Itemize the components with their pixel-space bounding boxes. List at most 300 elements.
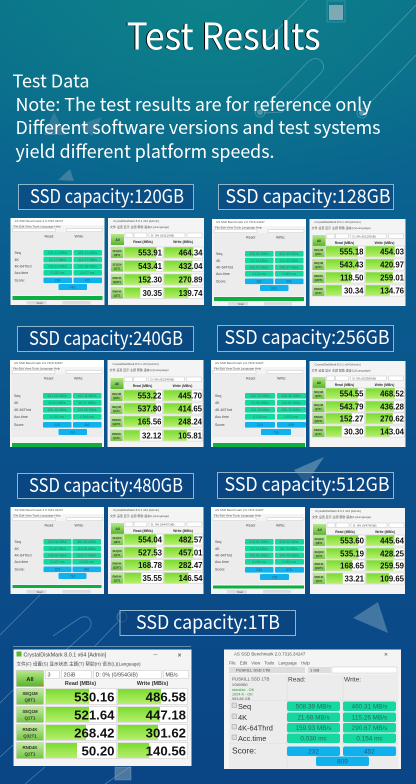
CrystalDiskMark window 240GB: Q32T1 — [113, 422, 121, 426]
AS SSD window 1TB: File Edit View Tools Language Help — [229, 660, 310, 666]
CrystalDiskMark window 240GB: D: 0% (0/224GiB) — [150, 377, 174, 381]
CrystalDiskMark window 128GB: RND4K — [314, 287, 323, 291]
CrystalDiskMark window 256GB: Q32T1 — [315, 419, 323, 423]
AS SSD window 512GB — [211, 507, 305, 594]
AS SSD window 1TB: 159.93 MB/s — [296, 725, 331, 732]
CrystalDiskMark window 1TB: × — [178, 652, 182, 660]
CrystalDiskMark window 480GB: 457.01 — [179, 548, 203, 558]
AS SSD window 128GB: File Edit View Tools Language Help — [215, 226, 262, 230]
AS SSD window 480GB — [10, 507, 104, 594]
CrystalDiskMark window 1TB — [14, 650, 192, 766]
heading: SSD capacity 1TB: SSD capacity:1TB — [136, 608, 280, 635]
AS SSD window 480GB: Acc.time — [14, 560, 28, 564]
AS SSD window 240GB — [10, 360, 104, 447]
CrystalDiskMark window 256GB: Read (MB/s) — [335, 383, 354, 387]
AS SSD window 1TB: 0.154 ms — [356, 736, 383, 742]
AS SSD window 512GB: Acc.time — [215, 560, 229, 564]
AS SSD window 512GB: 728 — [272, 576, 277, 580]
AS SSD window 128GB: Score: — [216, 280, 226, 284]
CrystalDiskMark window 480GB: D: 0% (0/447GiB) — [151, 522, 175, 526]
AS SSD window 480GB: 461.86 MB/s — [77, 540, 96, 544]
CrystalDiskMark window 128GB: SEQ1M — [314, 248, 323, 252]
text block: test data note: Different software versions and test systems — [16, 114, 380, 140]
AS SSD window 480GB: 146.80 MB/s — [48, 554, 67, 558]
CrystalDiskMark window 1TB: Read (MB/s) — [65, 681, 96, 687]
AS SSD window 128GB: 0.124 ms — [252, 272, 266, 276]
AS SSD window 512GB: 0.262 ms — [282, 560, 296, 564]
CrystalDiskMark window 256GB: 468.52 — [380, 390, 405, 398]
AS SSD window 128GB: 0.660 ms — [282, 272, 296, 276]
CrystalDiskMark window 1TB: RND4K — [22, 745, 38, 750]
CrystalDiskMark window 240GB: 537.80 — [138, 404, 162, 414]
AS SSD window 256GB: 0.675 ms — [284, 415, 298, 419]
AS SSD window 256GB: 736 — [273, 430, 279, 434]
CrystalDiskMark window 512GB: RND4K — [315, 562, 324, 566]
CrystalDiskMark window 128GB: 文件 设置 显示 主题 帮助 语言(L)(Language) — [312, 225, 371, 230]
AS SSD window 240GB: 362 — [84, 423, 90, 427]
AS SSD window 1TB: AS SSD Benchmark 2.0.7316.34247 — [234, 652, 306, 656]
AS SSD window 256GB: 4K — [215, 401, 220, 405]
AS SSD window 256GB: 408 — [288, 423, 294, 427]
AS SSD window 240GB: 0.151 ms — [50, 415, 64, 419]
CrystalDiskMark window 1TB: 521.64 — [74, 708, 115, 722]
CrystalDiskMark window 1TB: 486.58 — [146, 690, 186, 704]
AS SSD window 1TB: 452 — [364, 748, 375, 756]
AS SSD window 128GB — [212, 219, 306, 306]
CrystalDiskMark window 256GB: CrystalDiskMark 8.0.1 x64 [Admin] — [314, 362, 361, 366]
AS SSD window 256GB: 21.96 MB/s — [251, 401, 269, 405]
CrystalDiskMark window 512GB — [310, 508, 405, 594]
drive info: 1024 K - OK — [232, 692, 253, 696]
AS SSD window 128GB: 182 — [256, 280, 262, 284]
CrystalDiskMark window 120GB: All — [115, 238, 120, 242]
AS SSD window 128GB: 4K — [216, 259, 221, 263]
AS SSD window 120GB: 143.14 MB/s — [48, 264, 67, 268]
CrystalDiskMark window 120GB: 553.91 — [138, 248, 163, 258]
CrystalDiskMark window 120GB: 30.35 — [142, 289, 163, 298]
AS SSD window 256GB — [211, 360, 306, 447]
CrystalDiskMark window 256GB: SEQ1M — [314, 403, 323, 407]
CrystalDiskMark window 512GB: Read (MB/s) — [335, 530, 355, 534]
CrystalDiskMark window 512GB: 文件 设置 显示 主题 帮助 语言(L)(Language) — [312, 514, 371, 519]
CrystalDiskMark window 480GB: Q1T1 — [114, 553, 121, 557]
CrystalDiskMark window 480GB: 554.04 — [138, 536, 163, 544]
AS SSD window 128GB: Write: — [276, 236, 285, 240]
CrystalDiskMark window 240GB: 165.56 — [138, 418, 162, 426]
AS SSD window 120GB: 0.128 ms — [51, 271, 65, 275]
CrystalDiskMark window 256GB: 143.04 — [380, 428, 405, 436]
AS SSD window 512GB: 0.264 ms — [252, 560, 266, 564]
AS SSD window 480GB: 223 — [55, 568, 60, 572]
AS SSD window 1TB: 460.31 MB/s — [352, 704, 387, 710]
CrystalDiskMark window 512GB: Q8T1 — [316, 541, 323, 545]
CrystalDiskMark window 240GB: Q1T1 — [113, 436, 120, 440]
title: Test Results — [126, 6, 320, 60]
AS SSD window 128GB: 400 — [286, 280, 292, 284]
CrystalDiskMark window 120GB: RND4K — [113, 276, 122, 280]
AS SSD window 240GB: Acc.time — [14, 415, 28, 419]
AS SSD window 256GB: 141.18 MB/s — [250, 408, 270, 412]
AS SSD window 256GB: Score: — [215, 423, 225, 427]
CrystalDiskMark window 128GB: Q8T1 — [315, 252, 322, 256]
CrystalDiskMark window 256GB: Write (MB/s) — [375, 383, 394, 387]
AS SSD window 480GB: 520.36 MB/s — [48, 540, 67, 544]
CrystalDiskMark window 128GB: All — [317, 239, 321, 243]
CrystalDiskMark window 256GB: 270.62 — [380, 414, 405, 424]
CrystalDiskMark window 1TB: Q1T1 — [25, 716, 36, 720]
AS SSD window 120GB: 4K-64Thrd — [14, 264, 31, 268]
CrystalDiskMark window 120GB: Q1T1 — [114, 266, 121, 270]
CrystalDiskMark window 256GB: Q8T1 — [315, 394, 322, 398]
AS SSD window 512GB: 378 — [286, 568, 292, 572]
AS SSD window 512GB: 88.75 MB/s — [280, 547, 298, 551]
CrystalDiskMark window 480GB: 35.55 — [142, 574, 163, 583]
CrystalDiskMark window 240GB: 32.12 — [142, 432, 162, 440]
AS SSD window 128GB: Start — [238, 302, 245, 306]
CrystalDiskMark window 256GB: 543.79 — [340, 402, 364, 412]
AS SSD window 120GB: 0.677 ms — [81, 271, 95, 275]
drive info: PUSKILL SSD 1TB — [232, 676, 269, 682]
CrystalDiskMark window 240GB: Q8T1 — [113, 396, 120, 400]
CrystalDiskMark window 256GB: RND4K — [314, 428, 323, 432]
CrystalDiskMark window 512GB: Q32T1 — [315, 566, 324, 570]
AS SSD window 1TB: 508.39 MB/s — [296, 704, 331, 710]
CrystalDiskMark window 480GB — [108, 507, 204, 594]
CrystalDiskMark window 240GB: SEQ1M — [112, 392, 121, 396]
AS SSD window 120GB: File Edit View Tools Language Help — [14, 224, 61, 228]
CrystalDiskMark window 1TB: Q8T1 — [25, 698, 36, 702]
AS SSD window 240GB: 225 — [54, 423, 60, 427]
CrystalDiskMark window 240GB: SEQ1M — [112, 405, 121, 409]
heading: SSD capacity 512GB: SSD capacity:512GB — [224, 470, 390, 497]
AS SSD window 120GB: 256.98 MB/s — [78, 264, 97, 268]
AS SSD window 512GB: 425.50 MB/s — [279, 540, 299, 544]
CrystalDiskMark window 480GB: Read (MB/s) — [133, 529, 153, 533]
AS SSD window 1TB: Seq — [238, 702, 251, 711]
CrystalDiskMark window 256GB: 30.30 — [344, 428, 364, 436]
AS SSD window 120GB: Write: — [74, 234, 84, 238]
AS SSD window 240GB: File Edit View Tools Language Help — [13, 366, 60, 370]
CrystalDiskMark window 480GB: RND4K — [113, 562, 122, 566]
CrystalDiskMark window 128GB: 30.34 — [344, 286, 364, 296]
CrystalDiskMark window 128GB: 118.50 — [340, 274, 364, 282]
AS SSD window 240GB: 86.37 MB/s — [78, 401, 96, 405]
AS SSD window 120GB: 461.10 MB/s — [78, 251, 97, 255]
AS SSD window 120GB: 521.13 MB/s — [48, 251, 67, 255]
AS SSD window 512GB: 4K — [215, 547, 220, 551]
CrystalDiskMark window 512GB: 535.19 — [340, 550, 365, 558]
CrystalDiskMark window 128GB: Q1T1 — [315, 291, 322, 295]
CrystalDiskMark window 256GB: SEQ1M — [314, 390, 323, 394]
CrystalDiskMark window 120GB: Q8T1 — [114, 253, 121, 257]
CrystalDiskMark window 1TB: RND4K — [22, 727, 38, 732]
AS SSD window 480GB: 223.77 MB/s — [77, 554, 96, 558]
CrystalDiskMark window 128GB: D: 0% (0/119GiB) — [352, 234, 376, 238]
CrystalDiskMark window 120GB: 270.89 — [179, 276, 203, 284]
AS SSD window 256GB: AS SSD Benchmark 2.0.7316.34247 — [215, 361, 264, 365]
AS SSD window 480GB: File Edit View Tools Language Help — [14, 514, 61, 518]
AS SSD window 1TB: 4K — [238, 713, 247, 722]
CrystalDiskMark window 1TB: 文件(F) 设置(S) 显示状态 主题(T) 帮助(H) 语言(L)(Language) — [16, 660, 141, 668]
dropdown selectors: 2GiB — [64, 673, 76, 679]
CrystalDiskMark window 240GB: All — [115, 382, 119, 386]
AS SSD window 512GB: File Edit View Tools Language Help — [214, 514, 261, 518]
CrystalDiskMark window 240GB: Q1T1 — [113, 409, 120, 413]
CrystalDiskMark window 120GB — [108, 218, 204, 305]
AS SSD window 256GB: 214 — [257, 423, 263, 427]
AS SSD window 120GB: Seq — [14, 251, 21, 255]
AS SSD window 1TB: 232 — [308, 748, 319, 756]
CrystalDiskMark window 480GB: Q1T1 — [114, 578, 121, 582]
AS SSD window 1TB: × — [384, 652, 388, 658]
CrystalDiskMark window 512GB: 428.25 — [380, 550, 405, 558]
CrystalDiskMark window 512GB: Q1T1 — [316, 554, 323, 558]
AS SSD window 240GB: 0.545 ms — [80, 415, 94, 419]
AS SSD window 240GB: 4K-64Thrd — [14, 408, 31, 412]
CrystalDiskMark window 512GB: RND4K — [315, 575, 324, 579]
AS SSD window 256GB: Write: — [277, 376, 286, 380]
CrystalDiskMark window 128GB: Write (MB/s) — [375, 241, 394, 245]
CrystalDiskMark window 512GB: SEQ1M — [314, 550, 324, 554]
CrystalDiskMark window 1TB: 50.20 — [81, 744, 114, 758]
AS SSD window 128GB: 663 — [271, 286, 277, 290]
CrystalDiskMark window 240GB: 105.81 — [178, 432, 203, 440]
CrystalDiskMark window 256GB: 152.27 — [340, 414, 364, 424]
AS SSD window 120GB: Start — [36, 301, 43, 305]
AS SSD window 240GB: 224.96 MB/s — [77, 408, 97, 412]
AS SSD window 1TB: 21.68 MB/s — [297, 714, 330, 722]
AS SSD window 128GB: 116.57 MB/s — [250, 266, 269, 270]
CrystalDiskMark window 240GB: RND4K — [112, 418, 121, 422]
AS SSD window 480GB: 4K — [14, 547, 19, 551]
AS SSD window 120GB — [10, 218, 104, 305]
CrystalDiskMark window 480GB: All — [115, 527, 120, 531]
AS SSD window 480GB: 386 — [84, 568, 89, 572]
AS SSD window 256GB: 112.91 MB/s — [282, 401, 301, 405]
CrystalDiskMark window 240GB: CrystalDiskMark 8.0.1 x64 [Admin] — [112, 362, 159, 366]
heading: SSD capacity 256GB: SSD capacity:256GB — [224, 323, 390, 350]
CrystalDiskMark window 120GB: Read (MB/s) — [133, 240, 153, 244]
AS SSD window 1TB: 809 — [337, 758, 348, 766]
AS SSD window 480GB: 0.127 ms — [51, 560, 65, 564]
AS SSD window 256GB: 520.78 MB/s — [250, 394, 270, 398]
CrystalDiskMark window 256GB: 文件 设置 显示 主题 帮助 语言(L)(Language) — [312, 368, 371, 372]
AS SSD window 128GB: 520.86 MB/s — [249, 252, 269, 256]
AS SSD window 512GB: Write: — [276, 524, 285, 528]
AS SSD window 240GB: 700 — [70, 430, 75, 434]
CrystalDiskMark window 512GB: CrystalDiskMark 8.0.1 x64 [Admin] — [315, 509, 361, 513]
CrystalDiskMark window 1TB: 447.18 — [146, 708, 186, 722]
CrystalDiskMark window 256GB: Q1T1 — [315, 407, 322, 411]
drive selector: 1 GB — [310, 668, 319, 672]
CrystalDiskMark window 120GB: 543.41 — [138, 262, 163, 271]
AS SSD window 256GB: 4K-64Thrd — [215, 408, 232, 412]
AS SSD window 128GB: 4K-64Thrd — [216, 266, 233, 270]
AS SSD window 240GB: 22.04 MB/s — [48, 401, 66, 405]
drive selector: PUSKILL SSD 1TB — [236, 668, 270, 672]
CrystalDiskMark window 120GB: D: 0% (0/111GiB) — [151, 233, 174, 237]
AS SSD window 512GB: Seq — [215, 540, 221, 544]
CrystalDiskMark window 1TB: Q32T1 — [23, 734, 37, 738]
AS SSD window 1TB: 115.26 MB/s — [352, 714, 387, 722]
CrystalDiskMark window 512GB: Q1T1 — [316, 579, 323, 583]
AS SSD window 240GB: 411.11 MB/s — [78, 394, 97, 398]
title: Test Results — [126, 6, 320, 60]
AS SSD window 480GB: 0.628 ms — [80, 560, 94, 564]
CrystalDiskMark window 512GB: Write (MB/s) — [375, 530, 395, 534]
CrystalDiskMark window 128GB: Q1T1 — [315, 265, 322, 269]
heading: SSD capacity 480GB: SSD capacity:480GB — [29, 471, 183, 498]
heading: SSD capacity 240GB: SSD capacity:240GB — [29, 324, 183, 351]
CrystalDiskMark window 480GB: Q32T1 — [113, 566, 122, 570]
CrystalDiskMark window 240GB: 553.22 — [138, 392, 162, 400]
AS SSD window 120GB: 238 — [55, 278, 60, 282]
AS SSD window 256GB: Read: — [246, 376, 256, 380]
AS SSD window 1TB: 4K-64Thrd — [238, 724, 273, 732]
CrystalDiskMark window 128GB: RND4K — [314, 274, 323, 278]
CrystalDiskMark window 1TB: 530.16 — [74, 690, 114, 704]
AS SSD window 240GB: 521.06 MB/s — [47, 394, 67, 398]
CrystalDiskMark window 128GB: 134.76 — [380, 286, 405, 296]
AS SSD window 480GB: 730 — [70, 574, 75, 578]
AS SSD window 128GB: AS SSD Benchmark 2.0.7316.34247 — [216, 220, 265, 224]
AS SSD window 240GB: Read: — [44, 376, 54, 380]
AS SSD window 240GB: Seq — [14, 394, 20, 398]
AS SSD window 256GB: Acc.time — [215, 415, 229, 419]
AS SSD window 240GB: AS SSD Benchmark 2.0.7316.34247 — [14, 361, 63, 365]
AS SSD window 120GB: AS SSD Benchmark 2.0.7316.34247 — [14, 219, 64, 223]
CrystalDiskMark window 128GB: Read (MB/s) — [335, 241, 354, 245]
AS SSD window 512GB: 4K-64Thrd — [215, 554, 232, 558]
AS SSD window 120GB: 4K — [14, 258, 19, 262]
AS SSD window 1TB: 0.030 ms — [300, 736, 327, 742]
CrystalDiskMark window 128GB: Q32T1 — [315, 278, 323, 282]
AS SSD window 128GB: 110.83 MB/s — [280, 259, 299, 263]
AS SSD window 240GB: Write: — [74, 376, 83, 380]
CrystalDiskMark window 120GB: 152.30 — [138, 276, 163, 284]
CrystalDiskMark window 512GB: 445.64 — [380, 536, 405, 546]
CrystalDiskMark window 256GB: 436.28 — [380, 402, 405, 412]
CrystalDiskMark window 240GB: 414.65 — [178, 404, 203, 414]
All button — [16, 670, 44, 686]
AS SSD window 480GB: Seq — [14, 540, 21, 544]
CrystalDiskMark window 1TB: 301.62 — [146, 726, 186, 740]
CrystalDiskMark window 240GB: 文件 设置 显示 主题 帮助 语言(L)(Language) — [110, 367, 169, 372]
CrystalDiskMark window 120GB: Q32T1 — [113, 280, 122, 284]
CrystalDiskMark window 240GB: 445.70 — [178, 392, 203, 400]
CrystalDiskMark window 120GB: CrystalDiskMark 8.0.1 x64 [Admin] — [113, 219, 159, 223]
AS SSD window 480GB: 22.62 MB/s — [49, 547, 66, 551]
CrystalDiskMark window 240GB: 248.24 — [178, 418, 203, 426]
heading: SSD capacity 120GB: SSD capacity:120GB — [30, 182, 184, 209]
CrystalDiskMark window 128GB: 259.01 — [380, 274, 405, 282]
text block: test data note: yield different platform speeds. — [16, 138, 274, 164]
CrystalDiskMark window 256GB: 554.55 — [340, 390, 364, 398]
AS SSD window 128GB: 21.14 MB/s — [250, 259, 268, 263]
AS SSD window 120GB: 111.07 MB/s — [78, 258, 97, 262]
AS SSD window 120GB: 743 — [70, 286, 75, 290]
AS SSD window 128GB: Seq — [216, 252, 222, 256]
AS SSD window 120GB: Acc.time — [14, 271, 28, 275]
text block: test data note — [12, 68, 380, 164]
dropdown selectors: D: 0% (0/954GiB) — [96, 673, 138, 679]
CrystalDiskMark window 480GB: 527.53 — [138, 548, 163, 558]
CrystalDiskMark window 120GB: 文件 设置 显示 主题 帮助 语言(L)(Language) — [110, 224, 169, 229]
heading: SSD capacity 128GB: SSD capacity:128GB — [226, 182, 390, 209]
AS SSD window 512GB: Score: — [215, 568, 225, 572]
AS SSD window 128GB: 245.37 MB/s — [279, 266, 299, 270]
CrystalDiskMark window 120GB: 464.34 — [179, 248, 203, 258]
CrystalDiskMark window 512GB: All — [317, 528, 322, 532]
CrystalDiskMark window 1TB: Q1T1 — [25, 752, 36, 756]
CrystalDiskMark window 1TB: CrystalDiskMark 8.0.1 x64 [Admin] — [24, 652, 107, 658]
CrystalDiskMark window 128GB: 543.43 — [340, 260, 364, 270]
CrystalDiskMark window 1TB: – — [154, 652, 158, 658]
CrystalDiskMark window 480GB: Q8T1 — [114, 540, 121, 544]
AS SSD window 256GB: Seq — [215, 394, 221, 398]
AS SSD window 512GB: Start — [237, 590, 244, 594]
AS SSD window 1TB: Read: — [288, 676, 306, 684]
CrystalDiskMark window 512GB: 109.65 — [380, 574, 405, 584]
AS SSD window 480GB: Write: — [74, 524, 84, 528]
AS SSD window 1TB: Acc.time — [238, 734, 266, 743]
CrystalDiskMark window 480GB: 文件 设置 显示 主题 帮助 语言(L)(Language) — [110, 513, 169, 518]
drive info — [232, 676, 269, 701]
CrystalDiskMark window 240GB: RND4K — [112, 432, 121, 436]
CrystalDiskMark window 1TB: 268.42 — [74, 726, 114, 740]
CrystalDiskMark window 120GB: SEQ1M — [112, 249, 122, 253]
AS SSD window 128GB: Read: — [246, 236, 256, 240]
text block: test data note: Note: The test results are for reference only — [16, 91, 372, 117]
AS SSD window 256GB: 0.126 ms — [253, 415, 267, 419]
AS SSD window 512GB: AS SSD Benchmark 2.0.7316.34247 — [215, 508, 264, 512]
AS SSD window 120GB: 21.17 MB/s — [49, 258, 66, 262]
CrystalDiskMark window 128GB — [310, 219, 406, 306]
CrystalDiskMark window 120GB: Q1T1 — [114, 294, 121, 298]
AS SSD window 480GB: 116.55 MB/s — [77, 547, 96, 551]
AS SSD window 512GB: 518.80 MB/s — [249, 540, 269, 544]
CrystalDiskMark window 120GB: SEQ1M — [112, 262, 122, 266]
AS SSD window 512GB: Read: — [246, 524, 256, 528]
AS SSD window 512GB: 244.45 MB/s — [279, 554, 299, 558]
CrystalDiskMark window 256GB: D: 0% (0/238GiB) — [352, 376, 376, 380]
CrystalDiskMark window 256GB: RND4K — [314, 415, 323, 419]
CrystalDiskMark window 256GB: Q1T1 — [315, 432, 322, 436]
CrystalDiskMark window 240GB: Read (MB/s) — [133, 384, 152, 388]
AS SSD window 128GB: Acc.time — [216, 272, 230, 276]
CrystalDiskMark window 480GB: RND4K — [113, 574, 122, 578]
All button: All — [26, 677, 34, 683]
CrystalDiskMark window 512GB: D: 0% (0/476GiB) — [353, 523, 377, 527]
AS SSD window 256GB: 250.78 MB/s — [281, 408, 301, 412]
dropdown selectors: MB/s — [166, 673, 178, 679]
CrystalDiskMark window 480GB: 168.78 — [138, 561, 163, 570]
CrystalDiskMark window 512GB: 259.59 — [380, 562, 405, 570]
AS SSD window 120GB: 415 — [85, 278, 90, 282]
CrystalDiskMark window 480GB: 282.47 — [179, 561, 202, 570]
AS SSD window 480GB: Read: — [44, 524, 54, 528]
text block: test data note: Test Data — [12, 68, 90, 94]
CrystalDiskMark window 120GB: RND4K — [113, 290, 122, 294]
CrystalDiskMark window 1TB: SEQ1M — [22, 709, 38, 714]
CrystalDiskMark window 256GB: All — [317, 381, 321, 385]
AS SSD window 480GB: Start — [36, 590, 43, 594]
AS SSD window 240GB: 4K — [14, 401, 19, 405]
AS SSD window 120GB: Score: — [14, 278, 25, 282]
drive selector — [229, 667, 397, 673]
dropdown selectors: 3 — [48, 673, 50, 679]
CrystalDiskMark window 480GB: Write (MB/s) — [173, 529, 193, 533]
